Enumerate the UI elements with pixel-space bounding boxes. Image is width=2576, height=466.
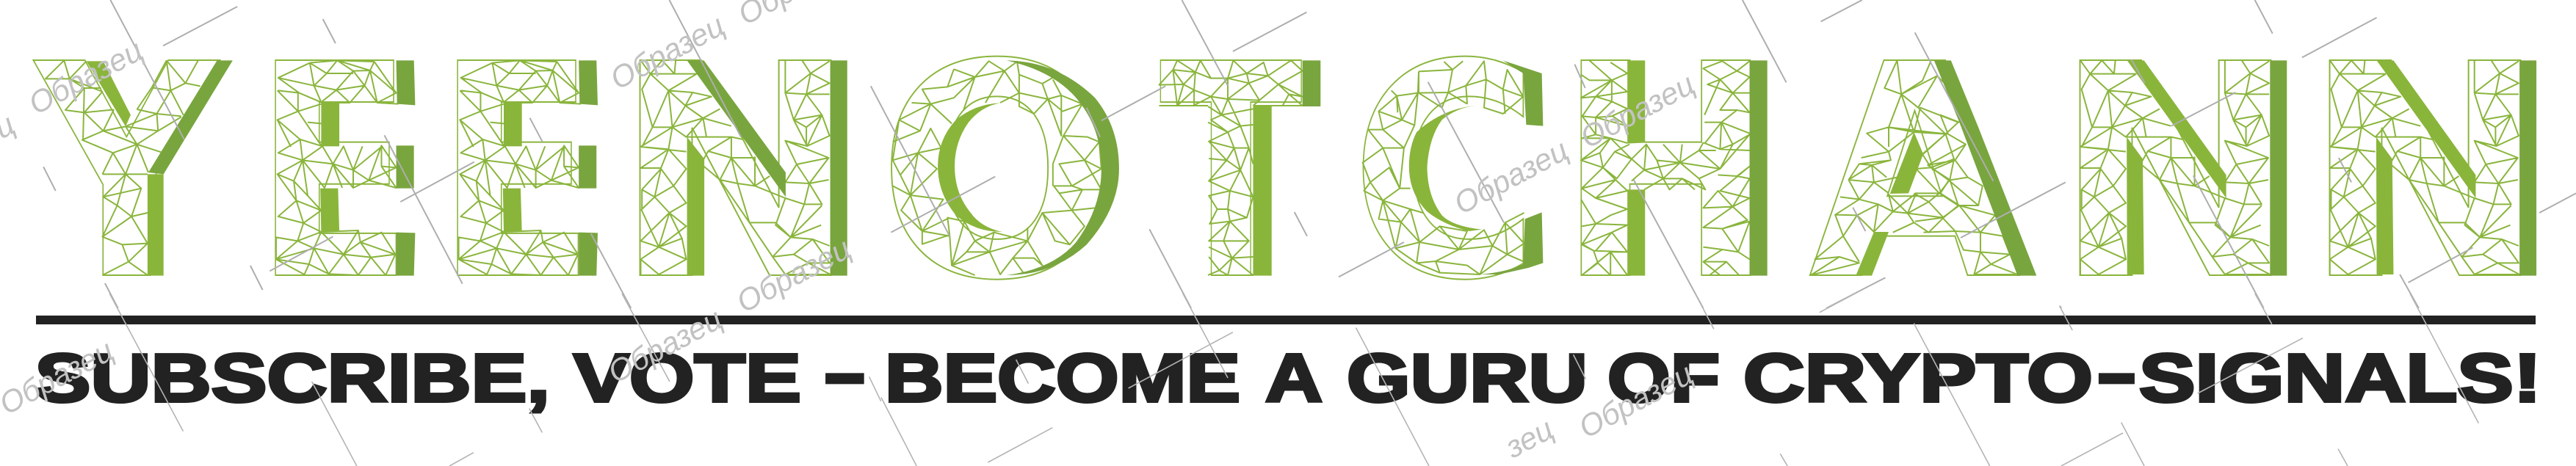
watermark lines and stamps: Образец (1574, 66, 1700, 155)
watermark lines and stamps: Образец (604, 7, 730, 96)
letter C: C (1350, 2, 1540, 346)
title: YEENOTCHANN mesh letters (32, 1, 2547, 346)
slogan text: A (1265, 340, 1323, 416)
slogan text: GURU (1347, 340, 1588, 416)
letter A: A (1809, 2, 2022, 345)
slogan text: CRYPTO (1743, 340, 2093, 416)
letter N: N (2053, 2, 2298, 345)
letter Y: Y (32, 1, 220, 345)
slogan text: OF (1607, 340, 1720, 416)
letter O: O (878, 1, 1117, 345)
slogan text: VOTE (574, 340, 801, 416)
slogan text (35, 335, 2541, 416)
slogan text: - (823, 335, 866, 411)
letter N: N (613, 2, 858, 345)
letter T: T (1159, 2, 1303, 346)
slogan text: - (2096, 335, 2137, 411)
watermark lines and stamps: зец (1499, 411, 1559, 465)
watermark lines and stamps: Образец (1448, 132, 1574, 221)
slogan text: SUBSCRIBE, (35, 340, 550, 416)
watermark lines and stamps: Образец (1573, 356, 1698, 445)
letter H: H (1557, 2, 1774, 346)
slogan text: BECOME (885, 340, 1240, 416)
watermark lines and stamps: Образец (731, 230, 856, 319)
watermark lines and stamps: Образец (602, 301, 728, 390)
watermark lines and stamps: Образец (23, 32, 148, 121)
letter E: E (436, 2, 596, 345)
letter N: N (2303, 2, 2547, 345)
slogan text: SIGNALS! (2139, 340, 2541, 416)
divider bar (36, 316, 2536, 324)
letter E: E (254, 2, 413, 345)
